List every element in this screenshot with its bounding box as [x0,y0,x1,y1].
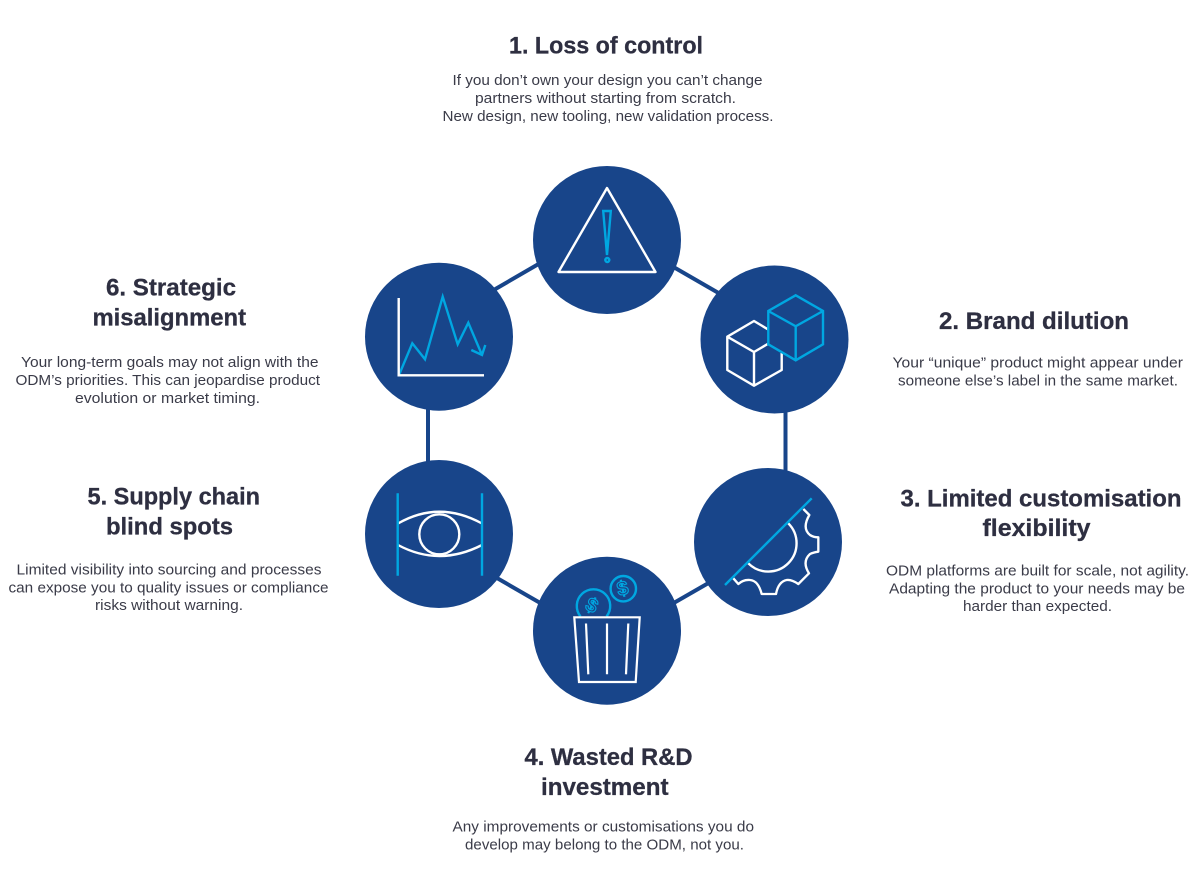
text block 2: Your “unique” product might appear under [892,356,1183,372]
panel: 4 wasted R&D investment [452,557,754,854]
heading 5 [88,484,260,540]
heading 3: 3. Limited customisation [900,486,1182,512]
text block 2: someone else’s label in the same market. [898,374,1178,390]
heading 3: flexibility [982,515,1091,542]
heading 3 [900,486,1182,542]
panel: 6 strategic misalignment [16,263,513,411]
panel: 3 limited customisation flexibility [694,468,1189,616]
text block 3: ODM platforms are built for scale, not agility. [886,564,1189,580]
circle icon: coins falling into bin: $ [615,577,630,601]
text block 1: partners without starting from scratch. [475,91,736,107]
text block 1: If you don’t own your design you can’t change [452,73,762,89]
text block 5: risks without warning. [95,598,243,614]
text block 6: evolution or market timing. [75,391,260,407]
text block 3 [886,564,1189,615]
circle icon: eye [365,460,513,608]
circle icon: two cubes [700,266,848,414]
heading 6 [92,274,246,332]
text block 1 [442,73,774,125]
connector lines between circles [428,262,786,604]
circle icon: half gear [694,468,842,616]
heading 6: 6. Strategic [106,274,236,302]
text block 6: ODM’s priorities. This can jeopardise product [16,373,320,389]
heading 4 [524,744,692,801]
text block 4: Any improvements or customisations you do [452,820,754,836]
circle icon: falling line chart [365,263,513,411]
text block 4 [452,820,754,854]
heading 1: 1. Loss of control [509,32,703,60]
heading 5: blind spots [106,514,233,540]
heading 2: 2. Brand dilution [939,308,1129,335]
text block 5: can expose you to quality issues or compliance [8,580,328,596]
heading 4: investment [541,774,669,801]
text block 6: Your long-term goals may not align with the [21,355,318,371]
panel: 1 loss of control [442,32,774,314]
text block 6 [16,355,320,407]
circle icon: coins falling into bin: $ [582,594,601,618]
text block 5: Limited visibility into sourcing and processes [16,562,322,578]
text block 2 [892,356,1183,390]
text block 4: develop may belong to the ODM, not you. [465,838,744,854]
heading 5: 5. Supply chain [88,484,260,510]
text block 1: New design, new tooling, new validation process. [442,109,774,125]
heading 6: misalignment [92,304,246,332]
panel: 5 supply chain blind spots [8,460,513,614]
panel: 2 brand dilution [700,266,1183,414]
circle icon: coins falling into bin [533,557,681,705]
text block 3: Adapting the product to your needs may be [889,582,1185,598]
text block 5 [8,562,328,614]
circle icon: warning triangle [533,166,681,314]
heading 4: 4. Wasted R&D [524,744,692,771]
text block 3: harder than expected. [963,599,1112,615]
